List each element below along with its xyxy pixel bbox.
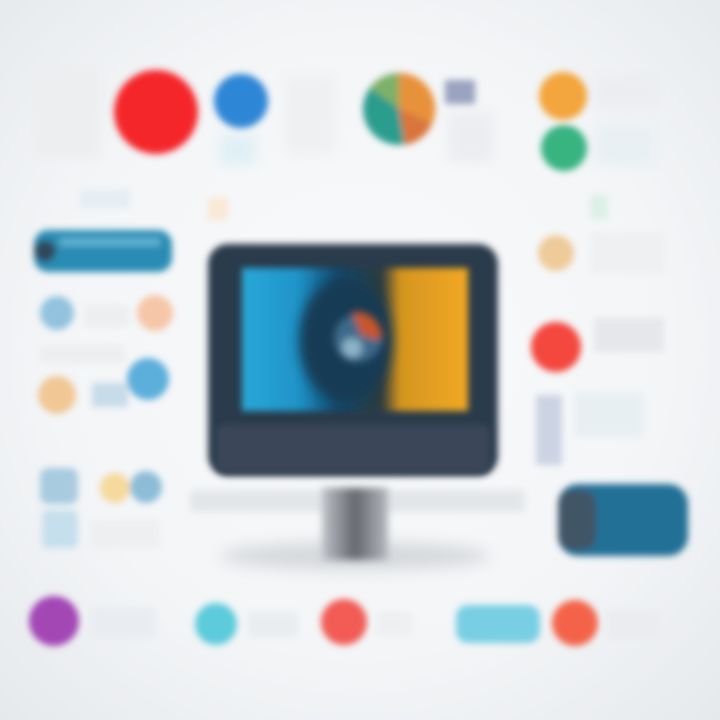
panel: top row placeholders (35, 68, 660, 165)
stand shadow (220, 542, 490, 570)
button: cyan pill (456, 605, 540, 643)
icon: purple circle (29, 596, 79, 646)
screen center icon (334, 312, 382, 362)
icon: tan (538, 235, 574, 271)
panel: top row icons (114, 70, 587, 171)
panel: monitor (190, 244, 525, 570)
button: blue banner (34, 230, 172, 272)
text block: after coral (376, 612, 412, 636)
icon: small green top (590, 195, 608, 219)
icon: small indigo block (445, 80, 475, 104)
screen (242, 268, 468, 411)
text block: beside red circle (594, 318, 664, 352)
screen dark center (299, 278, 391, 402)
button: dark blue panel (558, 484, 688, 556)
icon: small orange top center (208, 198, 228, 220)
heading above banner (80, 190, 130, 208)
icon: yellow and blue pair (100, 471, 162, 503)
icon: small blue square (40, 296, 74, 330)
text block: left lines (40, 345, 125, 363)
monitor body (208, 244, 498, 476)
text block: under blue circle (220, 135, 256, 165)
text block: middle left (84, 305, 129, 327)
icon: red circle (114, 70, 198, 154)
icon: cyan circle (195, 603, 237, 645)
monitor stand (322, 488, 388, 560)
panel: left column (34, 190, 173, 548)
text block: lower left (90, 520, 160, 548)
text block: lower right (574, 392, 644, 437)
icon: orange circle (539, 72, 587, 120)
text block: after cyan (248, 612, 298, 638)
desk base (190, 490, 525, 512)
icon: tan circle (38, 376, 76, 414)
text block: after purple (90, 608, 155, 638)
text block: top left (35, 68, 100, 158)
icon: blue circle right (127, 358, 169, 400)
panel: bottom row icons (29, 596, 661, 646)
icon: coral circle (321, 599, 367, 645)
icon: bottom left stack (40, 468, 78, 548)
text block: right upper (590, 232, 665, 274)
icon: light blue cluster (92, 383, 128, 407)
icon: peach circle (137, 295, 173, 331)
text block: right of pie chart (448, 112, 493, 162)
panel: right column (208, 195, 688, 556)
icon: red circle right (531, 322, 581, 372)
icon: blue circle (214, 74, 268, 128)
text block: after orange-red (606, 610, 661, 640)
icon: orange-red circle (552, 600, 598, 646)
icon: vertical bar (536, 395, 562, 465)
icon: green circle (541, 125, 587, 171)
monitor bottom bezel (216, 425, 490, 473)
text block: top right (595, 75, 660, 165)
text block: right of blue circle (285, 75, 335, 155)
icon: pie chart (363, 73, 435, 145)
